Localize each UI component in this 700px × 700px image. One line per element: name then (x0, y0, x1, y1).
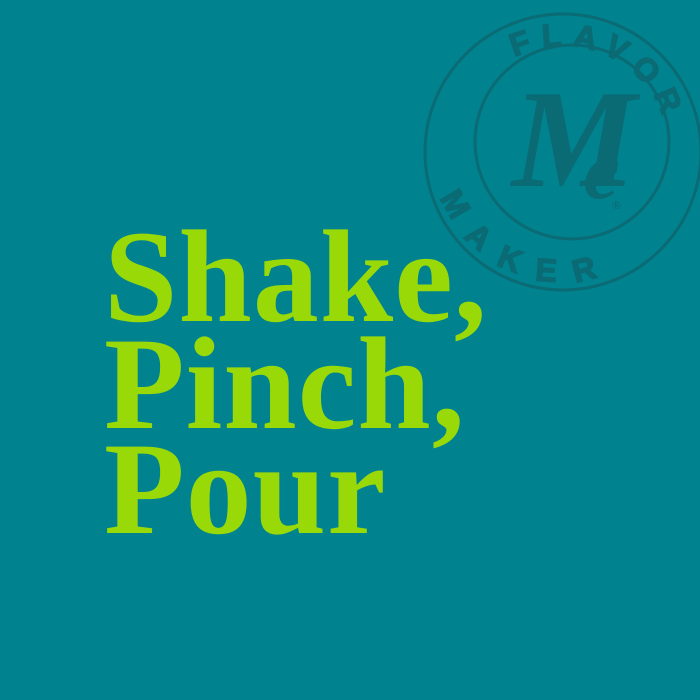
badge: flavor maker logo: MAKER (440, 188, 598, 284)
monogram: c (584, 128, 620, 216)
title line 3: Pour (104, 415, 387, 562)
monogram: M (510, 62, 641, 217)
monogram: ® (612, 198, 621, 212)
badge: flavor maker logo: FLAVOR (508, 24, 680, 116)
title line 2: Pinch, (104, 310, 466, 457)
title line 1: Shake, (104, 203, 488, 350)
